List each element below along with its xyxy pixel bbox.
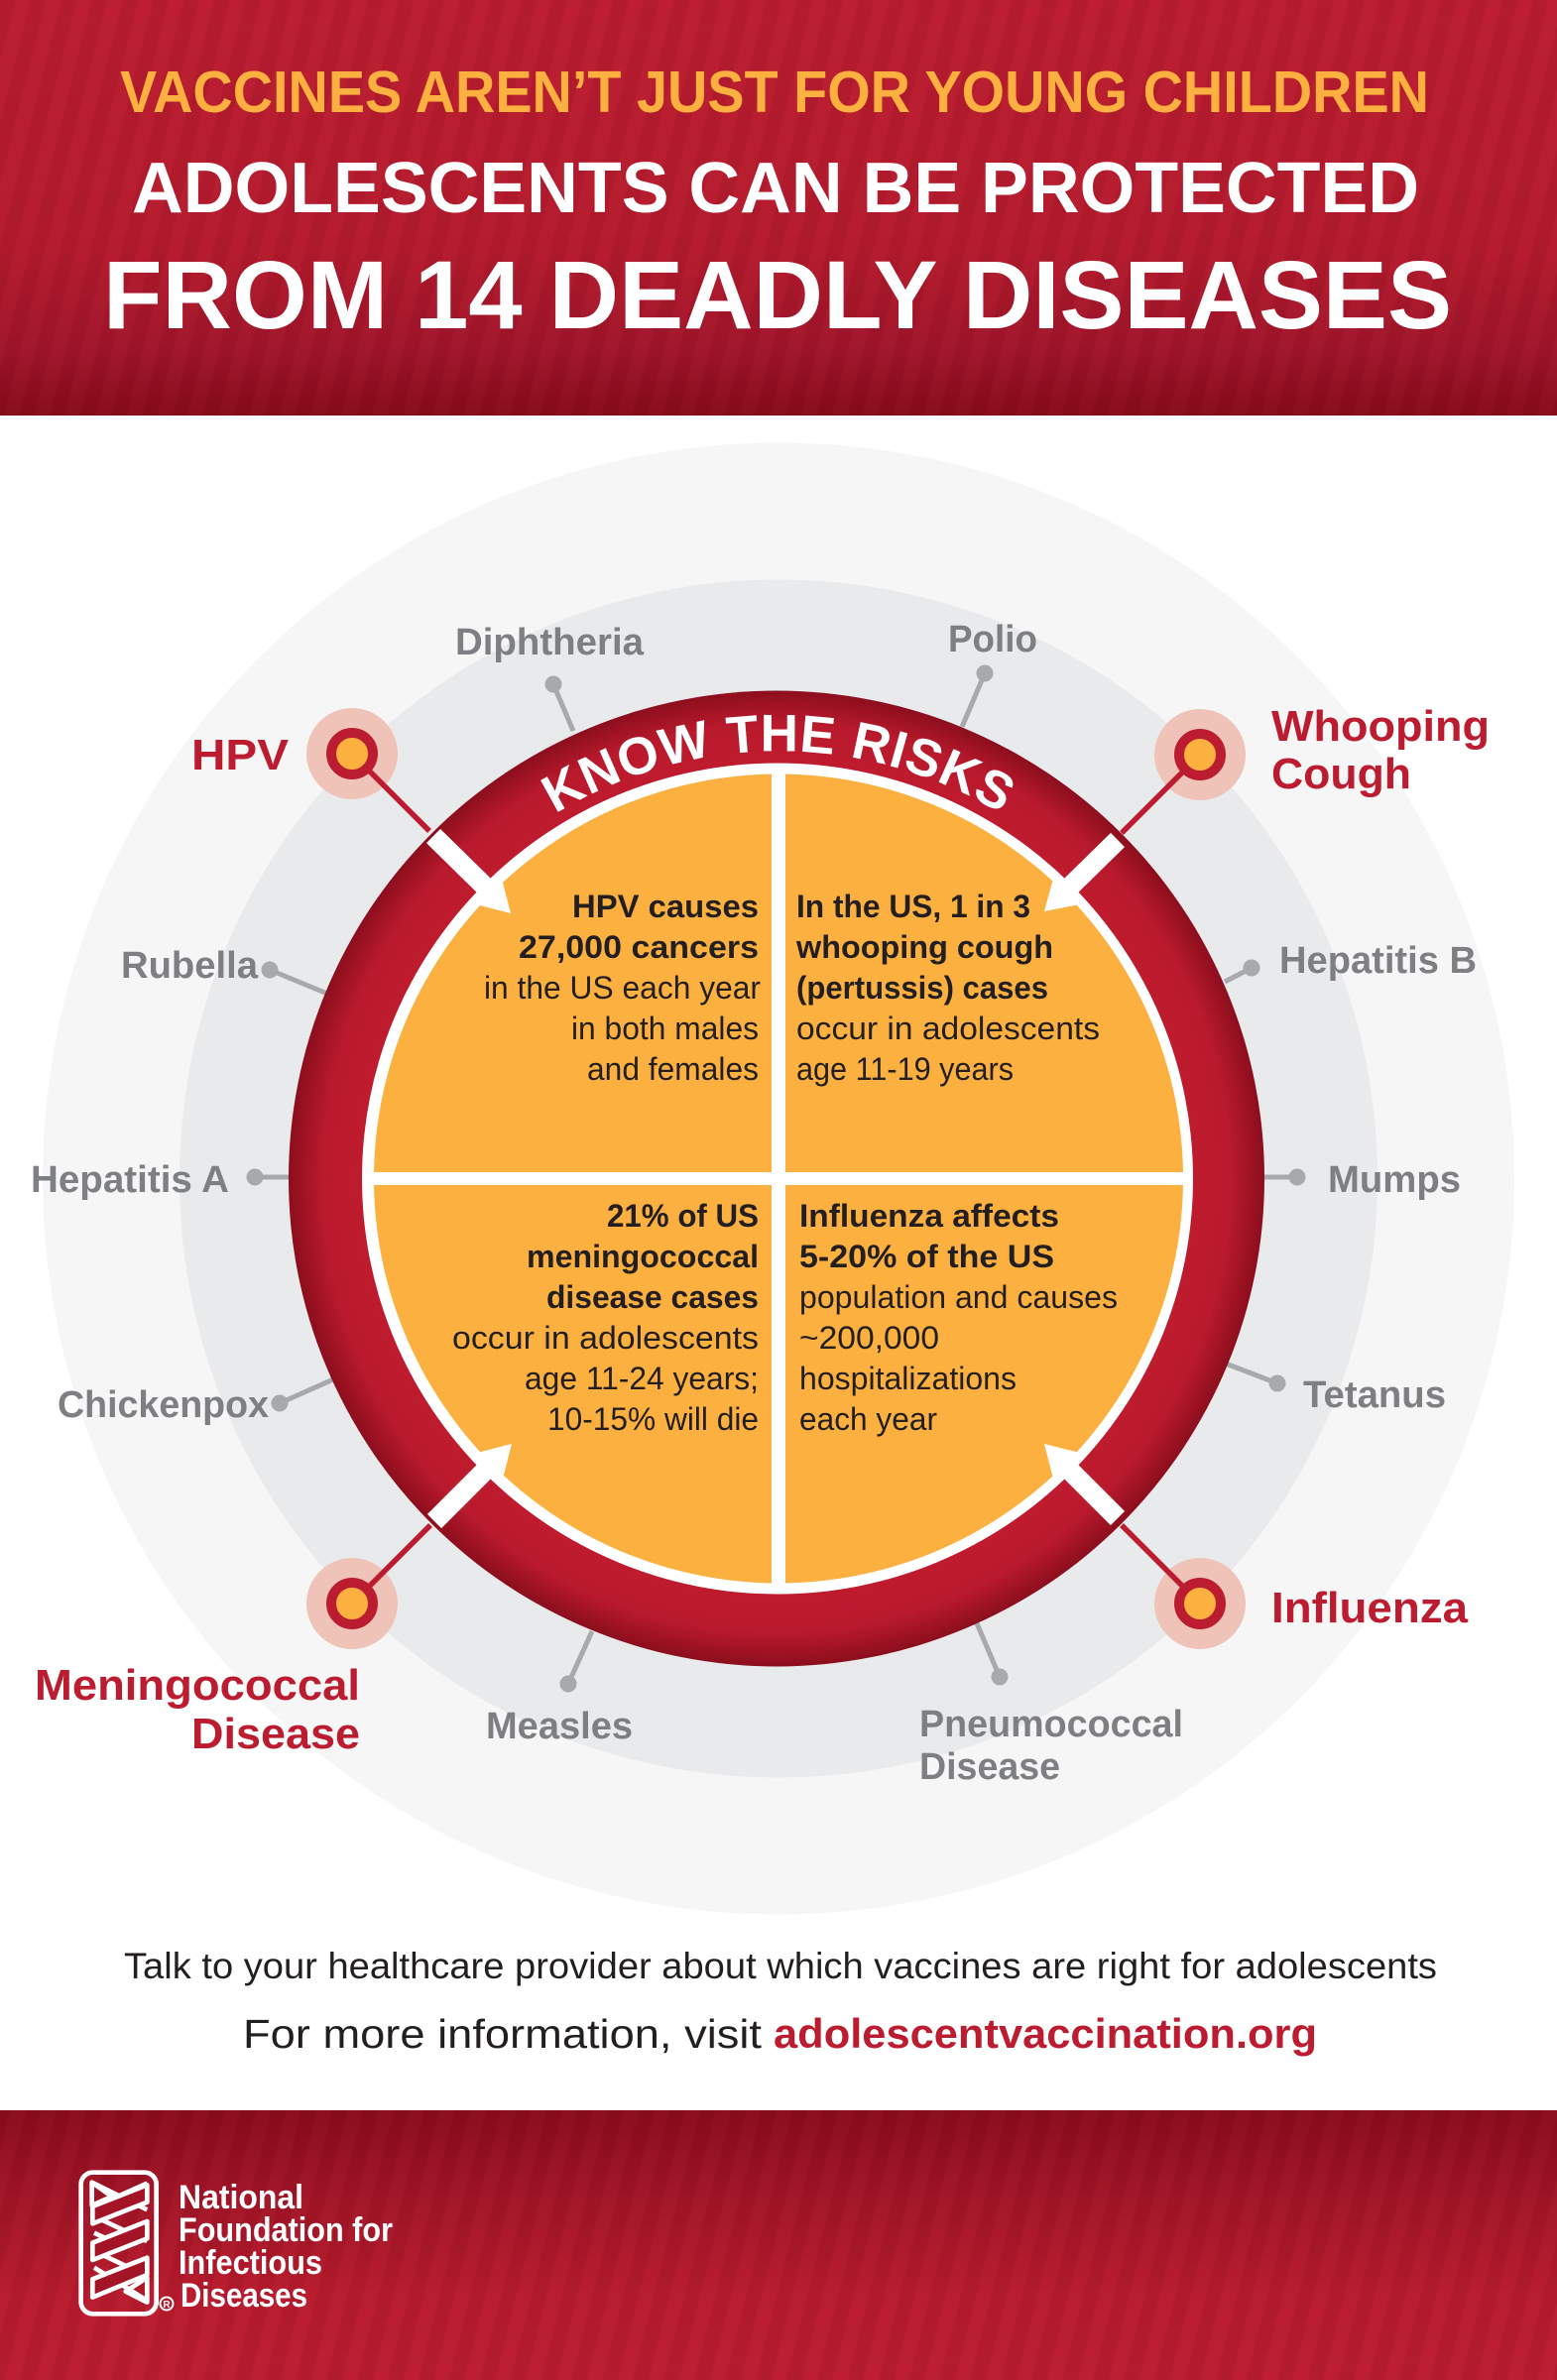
text: meningococcal risk: 10-15% will die bbox=[547, 1401, 759, 1437]
text: influenza risk: each year bbox=[799, 1401, 937, 1437]
header band bbox=[0, 0, 1557, 416]
background circles bbox=[43, 442, 1514, 1914]
red ring bbox=[289, 690, 1264, 1666]
text: HPV risk bbox=[484, 889, 761, 1087]
call to action text bbox=[124, 1946, 1437, 2057]
ring title: KNOW THE RISKS bbox=[540, 714, 1014, 812]
HPV callout bbox=[306, 708, 511, 913]
text: meningococcal risk: meningococcal bbox=[527, 1239, 759, 1274]
NFID wordmark: Foundation for bbox=[179, 2211, 393, 2249]
text: whooping cough risk: age 11-19 years bbox=[796, 1051, 1014, 1087]
Meningococcal callout bbox=[306, 1444, 512, 1649]
text: influenza risk: Influenza affects bbox=[799, 1198, 1059, 1234]
title line 1: VACCINES AREN’T JUST FOR YOUNG CHILDREN bbox=[120, 60, 1429, 125]
text: whooping cough risk: occur in adolescents bbox=[796, 1011, 1100, 1046]
text: meningococcal risk: disease cases bbox=[546, 1279, 759, 1315]
grey disease labels: Diphtheria bbox=[455, 622, 645, 663]
registered mark bbox=[161, 2297, 173, 2311]
text: meningococcal risk: occur in adolescents bbox=[452, 1320, 759, 1356]
grey disease labels: Tetanus bbox=[1303, 1374, 1446, 1416]
NFID logo mark bbox=[81, 2173, 157, 2314]
grey disease labels: Polio bbox=[948, 619, 1037, 660]
grey disease labels: Hepatitis A bbox=[31, 1159, 229, 1201]
call to action text: adolescentvaccination.org bbox=[774, 2010, 1317, 2057]
text: meningococcal risk: 21% of US bbox=[607, 1198, 759, 1234]
registered mark: R bbox=[163, 2300, 171, 2311]
Influenza callout bbox=[1044, 1444, 1246, 1649]
text: whooping cough risk: In the US, 1 in 3 bbox=[796, 889, 1030, 924]
grey disease connectors bbox=[246, 664, 1305, 1692]
red disease labels: Whooping bbox=[1271, 702, 1490, 751]
red disease labels: Disease bbox=[191, 1710, 360, 1758]
orange quadrants bbox=[374, 774, 1183, 1583]
text: influenza risk: ~200,000 bbox=[799, 1320, 939, 1356]
risk wheel bbox=[289, 690, 1264, 1666]
grey disease labels: Measles bbox=[486, 1706, 633, 1747]
text: whooping cough risk: whooping cough bbox=[795, 929, 1053, 965]
text: whooping cough risk bbox=[795, 889, 1100, 1087]
grey disease labels bbox=[31, 619, 1477, 1788]
call to action text: For more information, visit bbox=[243, 2011, 763, 2057]
NFID wordmark: National bbox=[179, 2179, 303, 2216]
text: HPV risk: 27,000 cancers bbox=[519, 929, 759, 965]
red disease labels: HPV bbox=[191, 731, 290, 779]
NFID wordmark bbox=[179, 2179, 393, 2315]
red disease labels bbox=[35, 702, 1490, 1758]
call to action text: Talk to your healthcare provider about which vaccines are right for adolescents bbox=[124, 1946, 1437, 1986]
text: HPV risk: in the US each year bbox=[484, 970, 761, 1006]
NFID wordmark: Diseases bbox=[180, 2277, 307, 2315]
text: influenza risk: population and causes bbox=[799, 1279, 1118, 1315]
text: whooping cough risk: (pertussis) cases bbox=[796, 970, 1048, 1006]
red disease labels: Cough bbox=[1271, 750, 1411, 798]
text: influenza risk: hospitalizations bbox=[799, 1361, 1017, 1396]
red disease labels: Meningococcal bbox=[35, 1661, 360, 1710]
grey disease labels: Mumps bbox=[1328, 1159, 1461, 1201]
text: HPV risk: HPV causes bbox=[572, 889, 759, 924]
text: influenza risk: 5-20% of the US bbox=[799, 1239, 1054, 1274]
grey disease labels: Chickenpox bbox=[58, 1384, 269, 1426]
grey disease labels: Pneumococcal bbox=[919, 1704, 1183, 1745]
grey disease labels: Rubella bbox=[121, 945, 259, 987]
footer band bbox=[0, 2110, 1557, 2380]
text: meningococcal risk bbox=[452, 1198, 759, 1437]
text: HPV risk: and females bbox=[587, 1051, 759, 1087]
NFID wordmark: Infectious bbox=[179, 2244, 322, 2282]
grey disease labels: Disease bbox=[919, 1746, 1060, 1788]
text: meningococcal risk: age 11-24 years; bbox=[525, 1361, 759, 1396]
Whooping cough callout bbox=[1044, 709, 1246, 911]
text: influenza risk bbox=[799, 1198, 1118, 1437]
text: HPV risk: in both males bbox=[571, 1011, 759, 1046]
title line 2: ADOLESCENTS CAN BE PROTECTED bbox=[132, 149, 1419, 228]
red disease labels: Influenza bbox=[1271, 1584, 1469, 1632]
title line 3: FROM 14 DEADLY DISEASES bbox=[103, 241, 1452, 349]
grey disease labels: Hepatitis B bbox=[1279, 940, 1477, 982]
